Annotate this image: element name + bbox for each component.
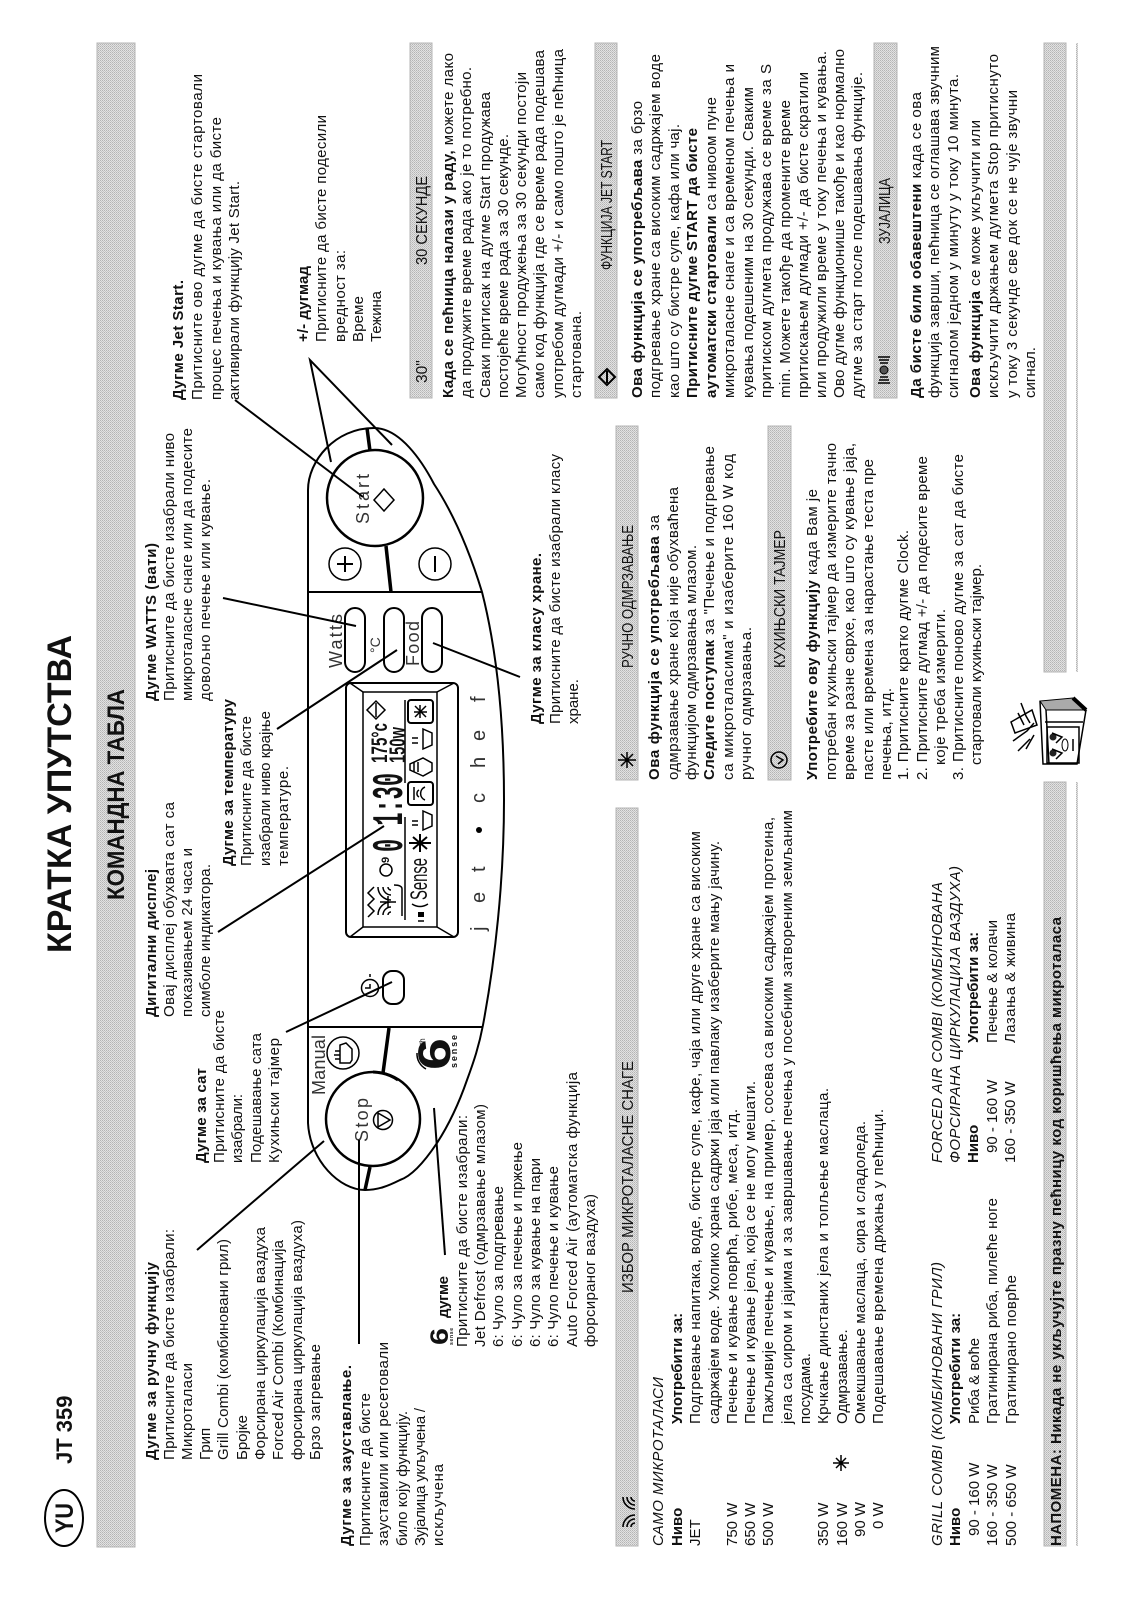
- display diamond: [367, 701, 385, 719]
- heading: [874, 43, 897, 398]
- text: Ова функција се употребљава за брзо: [629, 101, 646, 398]
- icon: oven with hands: [1011, 698, 1086, 764]
- title: КРАТКА УПУТСТВА: [41, 635, 79, 953]
- note band: НАПОМЕНА: Никада не укључујте празну пећницу код коришћења микроталаса: [1048, 916, 1065, 1546]
- callout: plus minus buttons: Тежина: [368, 290, 385, 342]
- microwave only table: јела са сиром и јајима и за завршавање печења у посебним затвореним земљаним: [779, 810, 796, 1425]
- microwave only table: Одмрзавање.: [834, 1329, 851, 1424]
- callout: temperature button: Притисните да бисте: [238, 716, 255, 866]
- microwave only table: [650, 810, 887, 1546]
- callout: temperature button: [220, 698, 292, 866]
- text: притиском дугмета продужава се време за S: [758, 64, 775, 398]
- text: Употребите ову функцију када Вам је: [804, 489, 821, 780]
- callout: manual function button: Притисните да бисте изабрали:: [161, 1229, 178, 1460]
- display sense label: Sense: [406, 858, 433, 900]
- text: као што су бистре супе, кафа или чај.: [666, 124, 683, 398]
- panel dividers: [308, 428, 483, 1190]
- text: или продужили време у току печења и кувања.: [813, 51, 830, 398]
- heading: ФУНКЦИЈА JET START: [599, 140, 616, 270]
- text: [629, 49, 866, 398]
- callout: jet start button: Дугме Jet Start.: [170, 280, 187, 400]
- callout: plus minus buttons: +/- дугмад: [295, 266, 312, 342]
- display clock and g: 9: [380, 857, 392, 863]
- oven body: [1040, 698, 1086, 764]
- forced air combi table: ФОРСИРАНА ЦИРКУЛАЦИЈА ВАЗДУХА): [947, 866, 964, 1163]
- jet chef lettering: e: [468, 892, 490, 903]
- callout: plus minus buttons: Притисните да бисте подесили: [313, 115, 330, 342]
- forced air combi table: Употребити за:: [965, 932, 982, 1043]
- text: [804, 443, 985, 780]
- display temperature and power: [367, 723, 410, 763]
- grill combi table: Гратинирана риба, пилеће ноге: [984, 1198, 1001, 1424]
- callout: clock button: Кухињски тајмер: [266, 1038, 283, 1163]
- text: искључити држањем дугмета Stop притиснуто: [985, 54, 1002, 398]
- microwave only table: Омекшавање маслаца, сира и сладоледа.: [852, 1121, 869, 1424]
- heading: КУХИЊСКИ ТАЈМЕР: [772, 530, 789, 668]
- 6th sense logo: 6: [409, 1038, 460, 1070]
- microwave only table: Подгревање напитака, воде, бистре супе, кафе, чаја или друге хране са високим: [687, 831, 704, 1424]
- panel: microwave power selection: [616, 808, 1020, 1546]
- text: одмрзавање хране која није обухваћена: [665, 486, 682, 780]
- microwave only table: Крчкање динстаних јела и топљење маслаца.: [815, 1088, 832, 1424]
- callout: temperature button: Дугме за температуру: [220, 698, 237, 866]
- callout: food class button: хране.: [565, 679, 582, 724]
- callout: jet start button: Притисните ово дугме да бисте стартовали: [189, 74, 206, 400]
- callout: food class button: Притисните да бисте изабрали класу: [547, 454, 564, 724]
- text: Следите поступак за "Печење и подгревање: [701, 446, 718, 780]
- callout: 6th sense button: 6: Чуло за печење и пржење: [509, 1142, 526, 1347]
- forced air combi table: FORCED AIR COMBI (КОМБИНОВАНА: [929, 882, 946, 1163]
- callout: stop button: [338, 1342, 447, 1546]
- text: дугме за старт после подешавања функције.: [849, 72, 866, 398]
- heading: [616, 426, 638, 780]
- text: Када се пећница налази у раду, можете лако: [440, 53, 457, 398]
- forced air combi table: Печење & колачи: [984, 920, 1001, 1043]
- forced air combi table: [929, 866, 1019, 1163]
- heading: РУЧНО ОДМРЗАВАЊЕ: [620, 525, 637, 668]
- callout: plus minus buttons: вредност за:: [332, 250, 349, 342]
- language badge YU: [45, 1490, 83, 1546]
- microwave only table: 500 W: [760, 1502, 777, 1546]
- callout: clock button: Подешавање сата: [248, 1032, 265, 1163]
- text: постојеће време рада за 30 секунде.: [495, 134, 512, 398]
- callout: 6th sense button: Auto Forced Air (аутоматска функција: [564, 1071, 581, 1347]
- text: које треба измерити.: [932, 609, 949, 765]
- start button: Start: [353, 474, 373, 524]
- section heading: control panel: [97, 43, 135, 1547]
- callout: watts button: микроталасне снаге или да подесите: [179, 428, 196, 701]
- jet chef lettering: e: [468, 730, 490, 741]
- text: функција заврши, пећница се оглашава звучним: [926, 46, 943, 398]
- clock button: [362, 971, 404, 1004]
- text: Да бисте били обавештени када се ова: [908, 91, 925, 398]
- grill combi table: 160 - 350 W: [984, 1463, 1001, 1546]
- callout: plus minus buttons: [295, 115, 385, 342]
- callout: clock button: Дугме за сат: [193, 1068, 210, 1163]
- text: [646, 446, 755, 780]
- display sense label: [406, 858, 433, 921]
- callout: watts button: довољно печење или кување.: [197, 479, 214, 701]
- callout: manual function button: Брзо загревање: [307, 1344, 324, 1460]
- callout: plus minus buttons: Време: [350, 296, 367, 342]
- panel: buzzer: [874, 43, 1039, 398]
- callout: manual function button: Грип: [197, 1428, 214, 1460]
- callout: manual function button: Grill Combi (комбиновани грил): [215, 1239, 232, 1460]
- callout: stop button: искључена: [430, 1463, 447, 1546]
- callout: manual function button: [143, 1220, 324, 1460]
- microwave only table: 350 W: [815, 1502, 832, 1546]
- panel: manual defrost: [616, 426, 755, 780]
- heading: [768, 426, 791, 780]
- callout: manual function button: Бројке: [234, 1415, 251, 1460]
- 6th sense logo: sense: [449, 1035, 459, 1068]
- icon: microwave waves: [623, 1497, 635, 1527]
- digital display: [346, 683, 458, 937]
- callout: 6th sense button: Притисните да бисте изабрали:: [454, 1115, 471, 1347]
- callout: digital display: [143, 801, 214, 1017]
- text: да продужите време рада ако је то потребно.: [458, 67, 475, 398]
- text: аутоматски стартовали са нивоом пуне: [703, 97, 720, 398]
- callout: digital display: показивањем 24 часа и: [179, 848, 196, 1017]
- microwave only table: Употребити за:: [669, 1313, 686, 1424]
- callout: food class button: [528, 454, 582, 724]
- manual label and hand icon: [309, 1035, 359, 1095]
- plus and minus buttons: [329, 548, 451, 580]
- note band: [1044, 43, 1078, 1546]
- callout: jet start button: процес печења и кувања или да бисте: [208, 117, 225, 400]
- display temperature and power: 175°c: [367, 723, 392, 763]
- microwave only table: Подешавање времена држања у пећници.: [870, 1109, 887, 1424]
- microwave only table: Ниво: [669, 1508, 686, 1546]
- forced air combi table: Ниво: [965, 1125, 982, 1163]
- language badge YU: YU: [51, 1503, 79, 1533]
- grill combi table: 500 - 650 W: [1003, 1463, 1020, 1546]
- text: Ова функција се употребљава за: [646, 514, 663, 780]
- panel: kitchen timer: [768, 426, 985, 780]
- jet chef lettering: j: [468, 927, 490, 932]
- digital display: 0 1:30: [366, 773, 416, 852]
- microwave only table: 90 W: [852, 1501, 869, 1537]
- text: [908, 46, 1039, 398]
- callout: 6th sense button: 6: Чуло за подгревање: [490, 1186, 507, 1347]
- grill combi table: Ниво: [947, 1508, 964, 1546]
- grill combi table: Гратинирано поврће: [1003, 1275, 1020, 1424]
- text: 2. Притисните дугмад +/- да подесите време: [914, 456, 931, 780]
- watts, temperature and food buttons: °C: [367, 637, 383, 653]
- callout: 6th sense button: форсираног ваздуха): [582, 1194, 599, 1347]
- callout: watts button: Дугме WATTS (вати): [143, 543, 160, 701]
- text: печења, итд.: [878, 688, 895, 780]
- callout: 6th sense button: Jet Defrost (одмрзавање млазом): [472, 1104, 489, 1347]
- callout: stop button: Притисните да бисте: [357, 1393, 374, 1546]
- jet chef lettering: t: [468, 866, 490, 872]
- callout: watts button: [143, 428, 214, 701]
- small 6th sense logo: 6: [426, 1328, 454, 1345]
- grill combi table: GRILL COMBI (КОМБИНОВАНИ ГРИЛ): [929, 1262, 946, 1546]
- text: само код функција где се време рада подешава: [531, 49, 548, 398]
- microwave only table: САМО МИКРОТАЛАСИ: [650, 1377, 667, 1546]
- microwave only table: 650 W: [742, 1502, 759, 1546]
- text: [440, 48, 585, 398]
- microwave only table: 750 W: [724, 1502, 741, 1546]
- microwave only table: 0 W: [870, 1501, 887, 1529]
- text: Ова функција се може укључити или: [967, 120, 984, 398]
- callout: manual function button: Forced Air Combi (Комбинација: [270, 1239, 287, 1460]
- microwave only table: 160 W: [834, 1502, 851, 1546]
- display temperature and power: 150w: [385, 726, 410, 763]
- text: min. Можете такође да промените време: [777, 100, 794, 398]
- text: кувања подешеним на 30 секунди. Сваким: [740, 87, 757, 398]
- forced air combi table: 160 - 350 W: [1002, 1080, 1019, 1163]
- callout: temperature button: изабрали ниво крајње: [257, 711, 274, 866]
- callout: stop button: зауставили или ресетовали: [375, 1342, 392, 1546]
- text: Могућност продужења за 30 секунди постоји: [513, 72, 530, 398]
- text: у току 3 секунде све док се не чује звучни: [1004, 90, 1021, 398]
- microwave only table: садржајем воде. Уколико храна садржи јаја или павлаку изаберите мању јачину.: [706, 841, 723, 1424]
- callout: stop button: Зујалица укључена /: [412, 1407, 429, 1546]
- hands holding a sheet: [1011, 703, 1037, 751]
- text: употребом дугмади +/- и само пошто је пећница: [550, 48, 567, 398]
- callout: stop button: било коју функцију.: [394, 1411, 411, 1546]
- text: стартована.: [568, 311, 585, 398]
- callout: stop button: Дугме за зауставлање.: [338, 1365, 355, 1546]
- callout: 6th sense button: 6: Чуло за кување на пари: [527, 1158, 544, 1347]
- text: сигнал.: [1022, 347, 1039, 398]
- grill combi table: [929, 1198, 1020, 1546]
- callout: 6th sense button: дугме: [435, 1276, 452, 1318]
- callout: digital display: Дигитални дисплеј: [143, 869, 160, 1017]
- callout: clock button: Притисните да бисте: [211, 1010, 228, 1163]
- text: ручног одмрзавања.: [738, 627, 755, 780]
- text: Сваки притисак на дугме Start продужава: [477, 91, 494, 398]
- heading: [410, 43, 432, 398]
- jet chef lettering: h: [468, 757, 490, 768]
- callout: clock button: изабрали:: [229, 1094, 246, 1163]
- 6th sense logo: th: [418, 1038, 427, 1045]
- callout: 6th sense button: 6: Чуло печење и кување: [545, 1166, 562, 1347]
- leader lines: [197, 360, 520, 1344]
- callout: temperature button: температуре.: [275, 766, 292, 866]
- display clock and g: [380, 857, 392, 876]
- text: сигналом једном у минуту у току 10 минута.: [945, 74, 962, 398]
- text: са микроталасима" и изаберите 160 W код: [720, 454, 737, 780]
- callout: watts button: Притисните да бисте изабрали ниво: [161, 433, 178, 701]
- text: 1. Притисните кратко дугме Clock.: [895, 530, 912, 780]
- microwave only table: посудама.: [797, 1353, 814, 1424]
- watts, temperature and food buttons: [326, 608, 442, 672]
- microwave only table: Печење и кување јела, која се не могу мешати.: [742, 1081, 759, 1424]
- text: Ово дугме функционише такође и као нормално: [831, 49, 848, 398]
- header: language badge, model and title: [41, 635, 83, 1546]
- text: микроталасне снаге и са временом печења и: [721, 64, 738, 398]
- callout: jet start button: [170, 74, 243, 400]
- watts, temperature and food buttons: Watts: [326, 614, 346, 668]
- model number: JT 359: [52, 1396, 77, 1464]
- small 6th sense logo: sense: [449, 1328, 455, 1345]
- text: стартовали кухињски тајмер.: [968, 564, 985, 765]
- heading: 30": [414, 360, 431, 383]
- callout: clock button: [193, 1010, 283, 1163]
- jet chef lettering: c: [468, 793, 490, 803]
- callout: manual function button: форсирана циркулација ваздуха): [289, 1220, 306, 1460]
- grill combi table: Употребити за:: [947, 1313, 964, 1424]
- control panel diagram: [308, 428, 504, 1190]
- panel outline: [308, 428, 504, 1190]
- heading: [595, 43, 617, 398]
- display wave symbols: [368, 885, 402, 917]
- grill combi table: 90 - 160 W: [966, 1462, 983, 1536]
- heading text: ИЗБОР МИКРОТАЛАСНЕ СНАГЕ: [620, 1061, 637, 1293]
- text: Притисните дугме START да бисте: [684, 128, 701, 398]
- microwave only table: Пажљивије печење и кување, на пример, сосева са високим садржајем протеина,: [760, 817, 777, 1424]
- stop button: [326, 1072, 420, 1166]
- callout: digital display: симболе индикатора.: [197, 864, 214, 1017]
- jet chef lettering: f: [468, 696, 490, 702]
- text: 3. Притисните поново дугме за сат да бисте: [950, 454, 967, 780]
- text: притискањем дугмади +/- да бисте скратили: [795, 72, 812, 398]
- text: потребан кухињски тајмер да измерите тачно: [823, 443, 840, 780]
- microwave only table: JET: [687, 1519, 704, 1546]
- callout: manual function button: Форсирана циркулација ваздуха: [252, 1226, 269, 1460]
- callout: manual function button: Дугме за ручну функцију: [143, 1261, 160, 1460]
- heading: ЗУЈАЛИЦА: [877, 177, 894, 244]
- heading: [616, 808, 638, 1546]
- text: функцијом одмрзавања млазом.: [683, 545, 700, 780]
- callout: manual function button: Микроталаси: [179, 1363, 196, 1460]
- manual label and hand icon: Manual: [309, 1035, 329, 1095]
- start button: [327, 450, 423, 546]
- stop button: Stop: [352, 1098, 372, 1142]
- display mode icons: [408, 700, 433, 852]
- panel: 30 seconds: [410, 43, 585, 398]
- jet chef lettering: [468, 696, 490, 932]
- forced air combi table: 90 - 160 W: [984, 1079, 1001, 1153]
- text: подгревање хране са високим садржајем воде: [647, 54, 664, 398]
- callout: digital display: Овај дисплеј обухвата сат са: [161, 801, 178, 1017]
- heading: 30 СЕКУНДЕ: [414, 176, 431, 265]
- callout: food class button: Дугме за класу хране.: [528, 553, 545, 724]
- microwave only table: Печење и кување поврћа, рибе, меса, итд.: [724, 1109, 741, 1424]
- text: време за разне сврхе, као што су кување јаја,: [841, 443, 858, 780]
- forced air combi table: Лазања & живина: [1002, 912, 1019, 1043]
- callout: 6th sense button: [426, 1071, 599, 1347]
- watts, temperature and food buttons: Food: [403, 621, 423, 666]
- panel: jet start function: [595, 43, 866, 398]
- grill combi table: Риба & воће: [966, 1338, 983, 1424]
- callout: jet start button: активирали функцију Jet Start.: [226, 181, 243, 400]
- text: пасте или времена за нарастање теста пре: [860, 459, 877, 780]
- section heading: control panel: КОМАНДНА ТАБЛА: [103, 689, 130, 900]
